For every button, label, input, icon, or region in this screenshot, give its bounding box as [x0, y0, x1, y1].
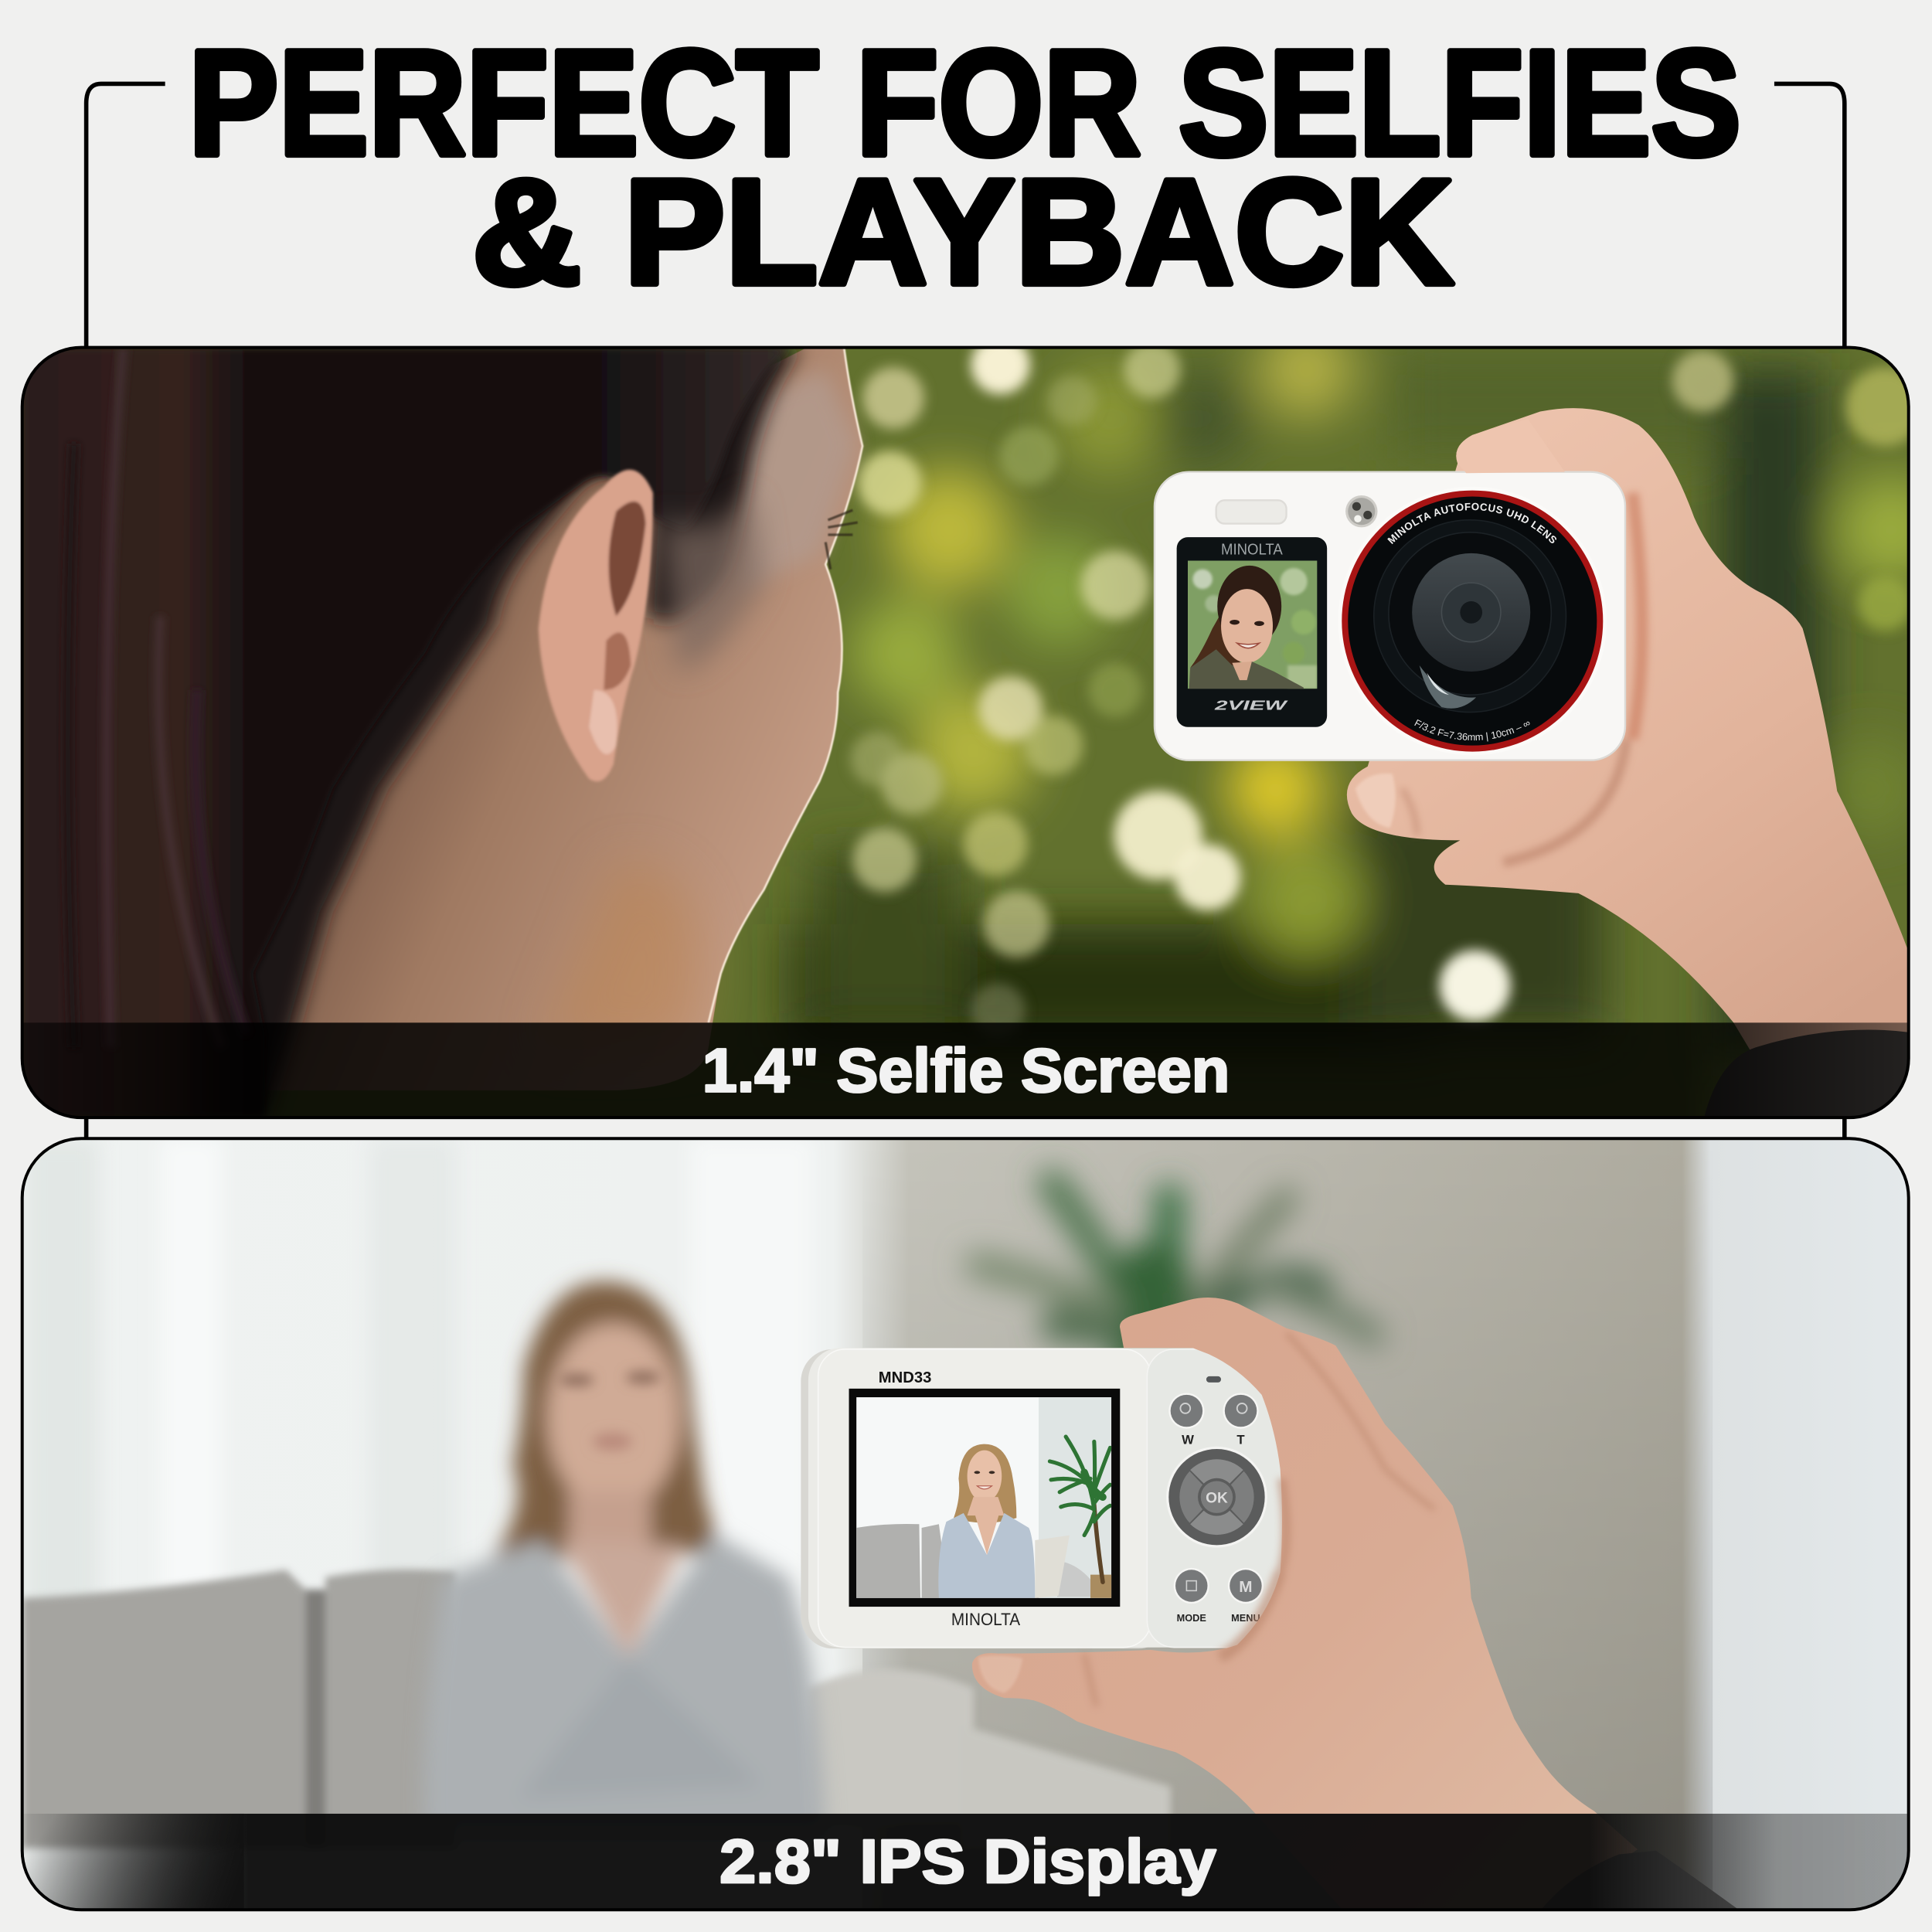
- camera: directional pad: OK: [1206, 1490, 1228, 1506]
- camera: lens: MINOLTA AUTOFOCUS UHD LENS: [1387, 502, 1556, 544]
- camera: T label: T: [1236, 1433, 1245, 1447]
- camera: MODE label: MODE: [1177, 1612, 1206, 1624]
- panel: playback display: [22, 1138, 1909, 1916]
- camera: mode button: [1174, 1568, 1209, 1604]
- photo: sleeve: [1704, 1029, 1911, 1117]
- photo: hand holding camera: [972, 1298, 1638, 1916]
- camera: brand label: MINOLTA: [951, 1610, 1020, 1629]
- camera: lens: F/3.2 F=7.36mm | 10cm – ∞: [1414, 719, 1530, 742]
- photo: ear: [539, 470, 653, 781]
- finger over camera top: [1456, 419, 1565, 473]
- rim light on face edge: [709, 348, 862, 1022]
- camera: selfie screen: [1177, 537, 1327, 727]
- camera: directional pad: [1166, 1447, 1267, 1548]
- photo: blurred plant: [978, 1184, 1372, 1355]
- photo: hand holding camera: [1347, 408, 1911, 1060]
- display: woman: [938, 1444, 1035, 1598]
- photo: blurred sofa: [22, 1570, 1171, 1849]
- camera: zoom in button: [1223, 1393, 1259, 1429]
- camera: model label: MND33: [879, 1369, 931, 1386]
- photo: playback camera: [801, 1348, 1289, 1648]
- camera: MENU label: MENU: [1231, 1612, 1260, 1624]
- photo: selfie camera: [1153, 471, 1626, 761]
- photo: green bokeh background: [22, 321, 1932, 1117]
- photo: blurred woman: [423, 1281, 825, 1836]
- caption: 1.4" Selfie Screen: [702, 1036, 1230, 1105]
- screen: minolta logo: MINOLTA: [1221, 540, 1283, 558]
- camera: focus lamp: [1345, 495, 1378, 527]
- title frame: [87, 83, 1845, 1138]
- title: & PLAYBACK: [472, 148, 1454, 316]
- camera: menu button: [1228, 1568, 1264, 1604]
- camera: flash window: [1216, 500, 1287, 524]
- photo: sleeve: [1539, 1851, 1742, 1912]
- caption bar: [22, 1814, 1909, 1910]
- caption: 2.8" IPS Display: [719, 1827, 1216, 1896]
- photo: living room background: [22, 1138, 1909, 1910]
- display: playback photo: [856, 1397, 1113, 1598]
- camera: main display: [849, 1389, 1120, 1607]
- camera: lens: [1342, 490, 1603, 752]
- photo: eyelashes: [825, 510, 858, 570]
- screen: selfie photo: [1188, 560, 1317, 690]
- camera: menu button: M: [1239, 1578, 1253, 1596]
- screen: 2VIEW logo: 2VIEW: [1213, 697, 1288, 713]
- title: PERFECT FOR SELFIES: [189, 19, 1741, 187]
- panel: selfie screen: [20, 346, 1910, 1119]
- display: plant: [1049, 1437, 1111, 1582]
- photo: woman head from behind: [22, 348, 862, 1117]
- camera: status LED: [1206, 1376, 1221, 1383]
- title: [189, 19, 1741, 316]
- caption bar: [22, 1022, 1909, 1117]
- camera: zoom out button: [1168, 1393, 1205, 1429]
- camera: W label: W: [1182, 1433, 1194, 1447]
